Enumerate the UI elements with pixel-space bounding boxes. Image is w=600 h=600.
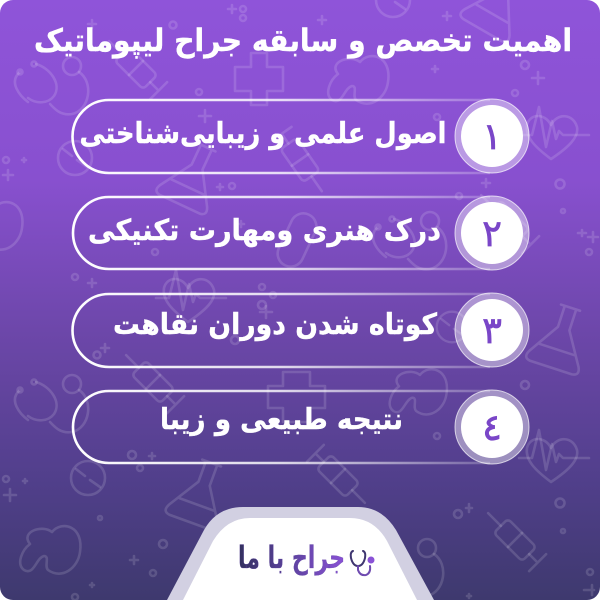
logo tab — [167, 507, 434, 600]
badge 4: ٤ — [482, 406, 502, 449]
pill outline 1 — [72, 100, 490, 173]
item 4 — [73, 390, 529, 464]
item 2 — [73, 196, 529, 270]
badge 2 — [455, 196, 529, 270]
item 1 — [72, 99, 529, 173]
pill outline 4 — [73, 391, 490, 463]
label 3: کوتاه شدن دوران نقاهت — [113, 307, 437, 341]
badge 2: ۲ — [482, 212, 502, 255]
pill outline 3 — [72, 294, 490, 367]
logo wordmark: جراح با ما — [238, 540, 345, 576]
item 3 — [72, 293, 529, 367]
label 2: درک هنری ومهارت تکنیکی — [88, 213, 441, 247]
badge 4 — [455, 390, 529, 464]
label 1: اصول علمی و زیبایی‌شناختی — [80, 116, 446, 150]
pill outline 2 — [73, 197, 490, 269]
label 4: نتیجه طبیعی و زیبا — [160, 402, 403, 436]
badge 1: ۱ — [482, 115, 502, 158]
badge 3 — [455, 293, 529, 367]
badge 3: ۳ — [482, 309, 502, 352]
badge 1 — [455, 99, 529, 173]
icon: stethoscope — [351, 551, 374, 575]
